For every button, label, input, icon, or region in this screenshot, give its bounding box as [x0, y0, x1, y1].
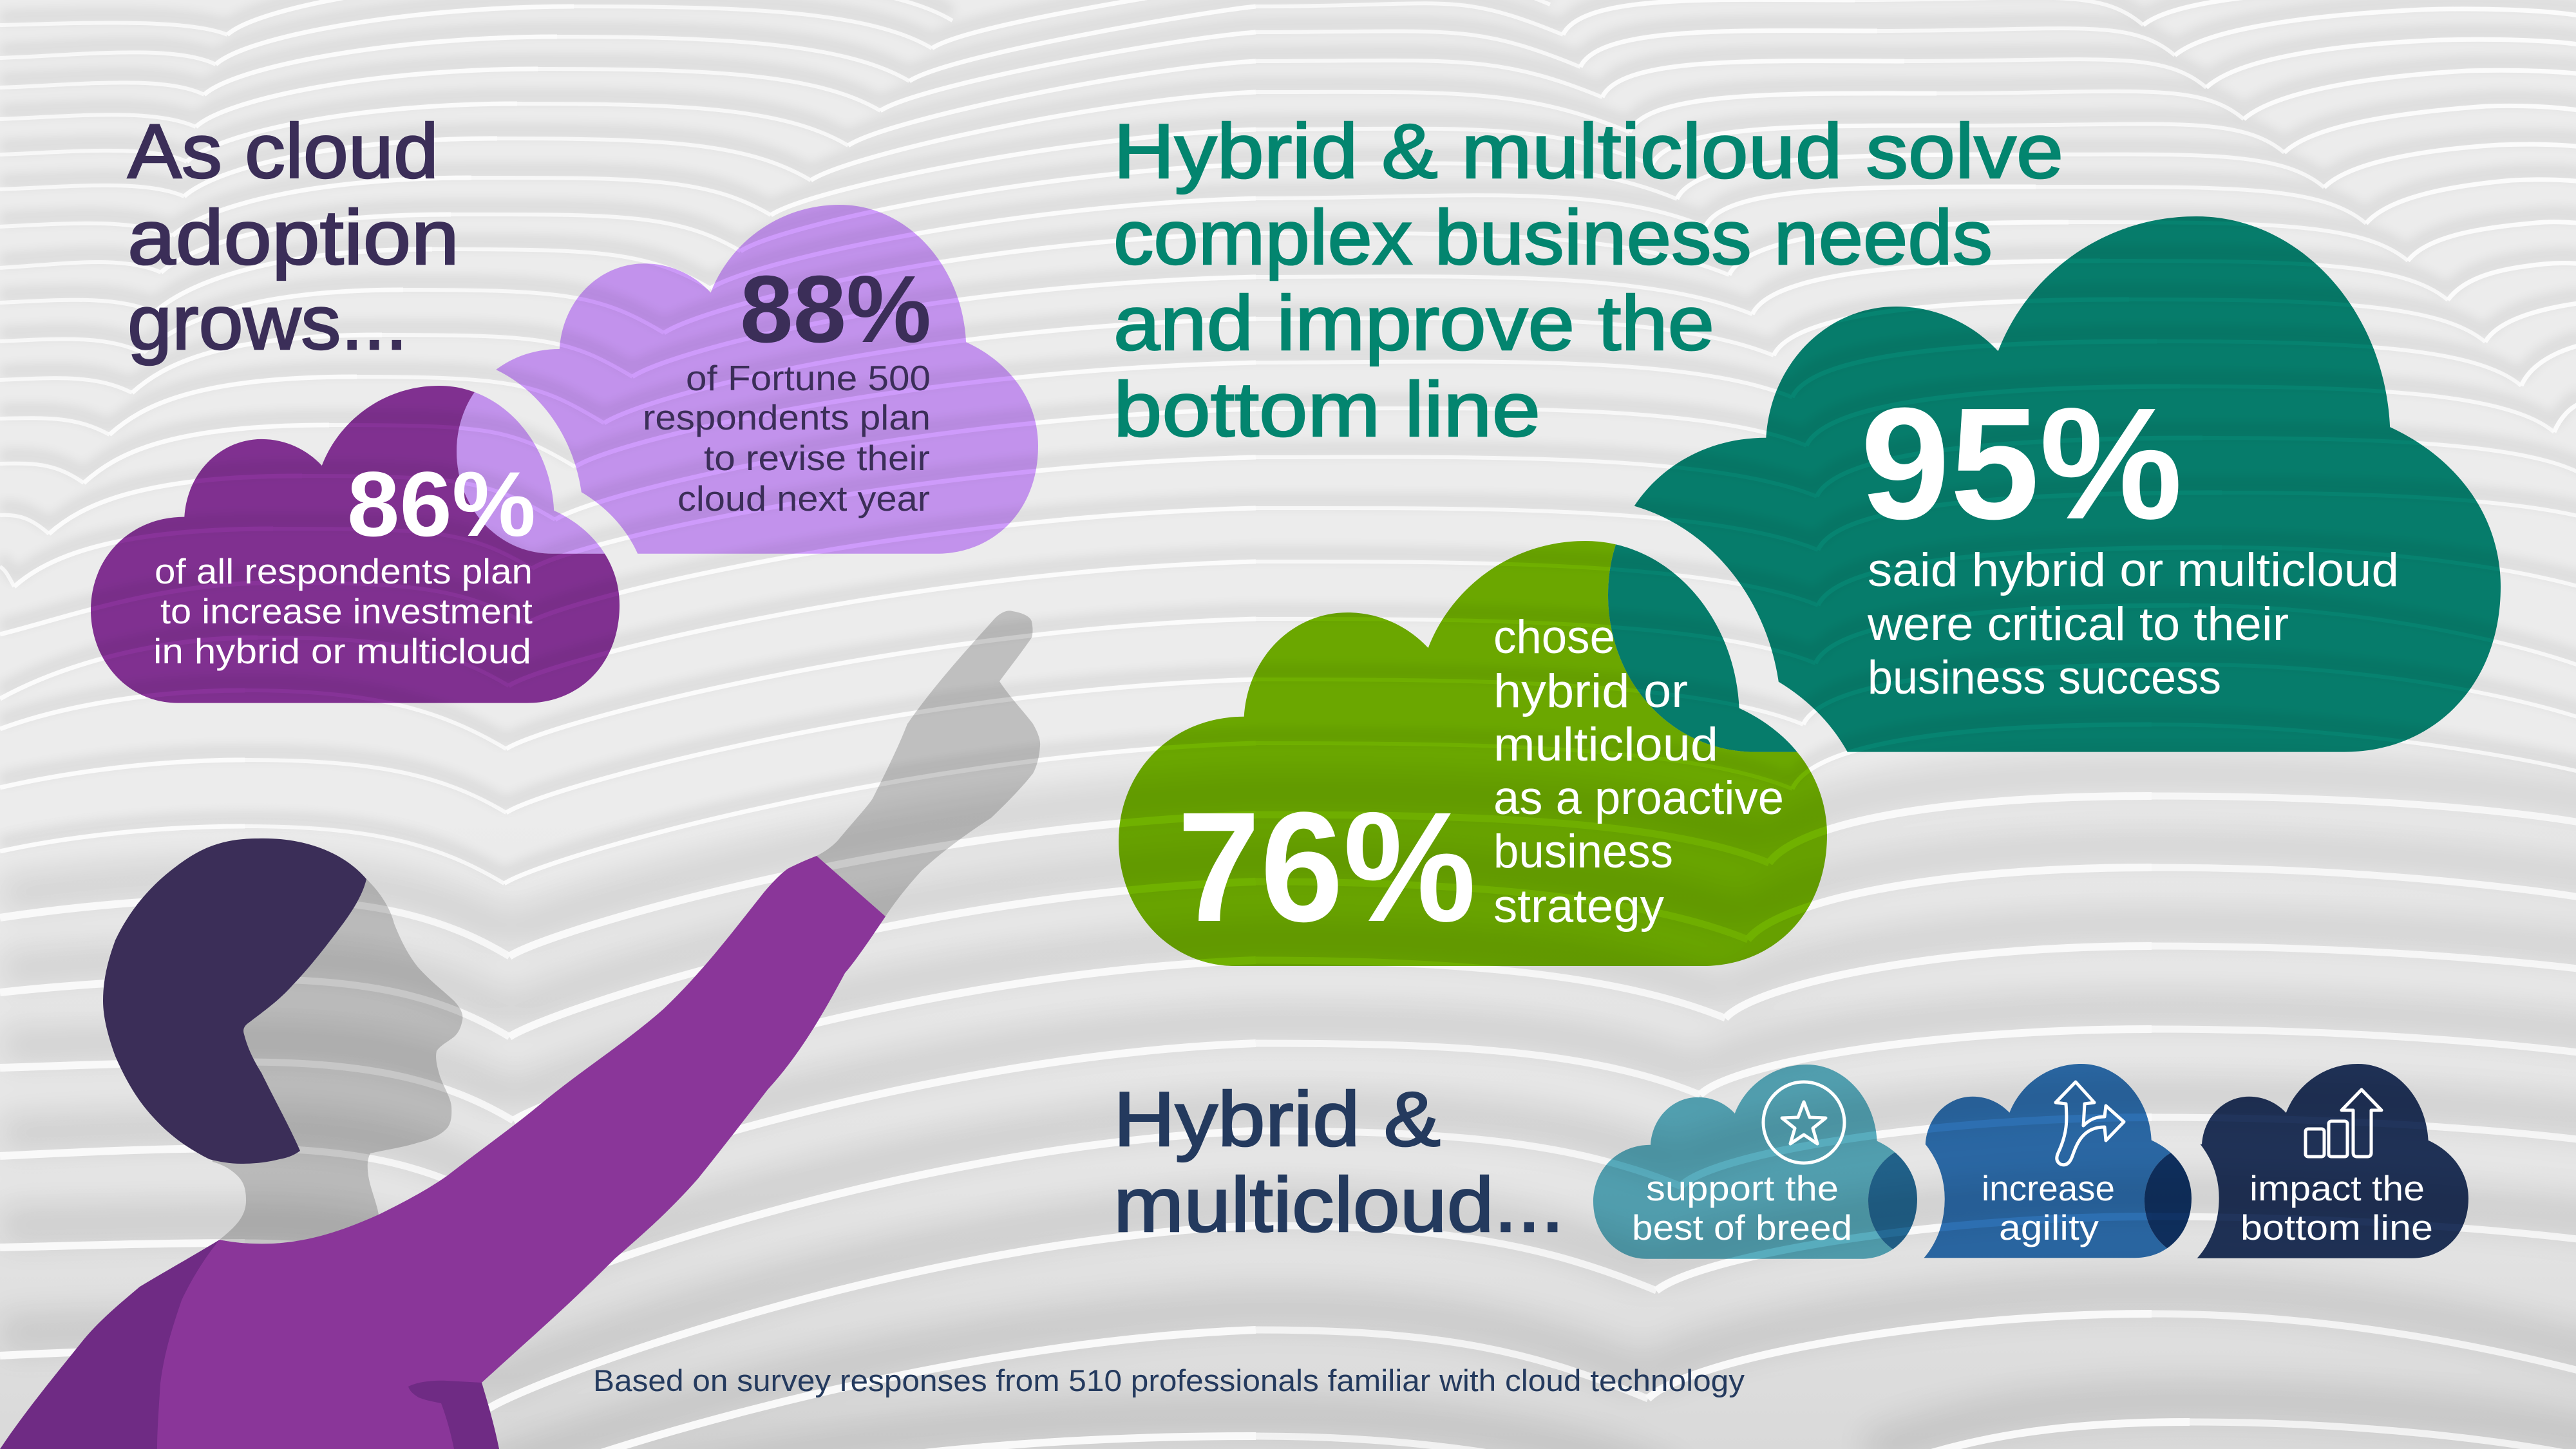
heading: hybrid and multicloud solve complex business needs: complex business needs [1113, 194, 1993, 281]
panel: 76 percent cloud: chose [1493, 611, 1615, 663]
panel: 86 percent cloud: 86% [347, 453, 536, 556]
heading: hybrid and multicloud: multicloud... [1113, 1162, 1564, 1248]
heading: hybrid and multicloud solve complex business needs: Hybrid & multicloud solve [1113, 108, 2063, 194]
panel: 86 percent cloud: to increase investment [160, 591, 533, 631]
panel: 88 percent cloud: 88% [740, 256, 931, 363]
panel: 76 percent cloud: hybrid or [1493, 665, 1688, 717]
heading: as cloud adoption grows: As cloud [128, 108, 439, 194]
panel: impact the bottom line cloud: bottom line [2240, 1208, 2433, 1247]
panel: 95 percent cloud: 95% [1861, 375, 2183, 553]
panel: impact the bottom line cloud [2197, 1064, 2468, 1258]
heading: hybrid and multicloud solve complex business needs: bottom line [1113, 366, 1540, 453]
panel: support the best of breed cloud: best of breed [1632, 1208, 1852, 1247]
panel: support the best of breed cloud [1593, 1065, 1917, 1259]
panel: 76 percent cloud: 76% [1177, 780, 1476, 954]
panel: 76 percent cloud: multicloud [1493, 719, 1718, 771]
heading: as cloud adoption grows [128, 108, 459, 366]
panel: 88 percent cloud: respondents plan [643, 397, 931, 437]
heading: hybrid and multicloud solve complex business needs [1113, 108, 2063, 453]
panel: 95 percent cloud: said hybrid or multicloud [1868, 544, 2399, 596]
panel: 76 percent cloud: strategy [1493, 880, 1665, 933]
panel: 88 percent cloud [457, 205, 1038, 554]
panel: 86 percent cloud: of all respondents plan [155, 551, 533, 591]
panel: 76 percent cloud: business [1493, 826, 1673, 878]
panel: 86 percent cloud: in hybrid or multicloud [153, 631, 531, 671]
panel: support the best of breed cloud: support the [1646, 1168, 1839, 1208]
panel: increase agility cloud [1924, 1064, 2192, 1258]
panel: increase agility cloud: increase [1982, 1168, 2115, 1208]
panel: 88 percent cloud: to revise their [704, 438, 930, 478]
panel: 95 percent cloud: business success [1868, 652, 2221, 704]
icon: growth bars and arrow [2306, 1090, 2382, 1157]
heading: hybrid and multicloud: Hybrid & [1113, 1076, 1441, 1162]
illustration: person pointing up [0, 611, 1040, 1449]
heading: hybrid and multicloud solve complex business needs: and improve the [1113, 280, 1714, 366]
heading: as cloud adoption grows: adoption [128, 194, 459, 281]
panel: 76 percent cloud: as a proactive [1493, 772, 1784, 824]
panel: 76 percent cloud [1119, 541, 1827, 966]
icon: branching arrow [2056, 1082, 2124, 1165]
panel: 95 percent cloud [1608, 216, 2501, 752]
panel: 86 percent cloud [91, 386, 620, 703]
footnote: survey source: Based on survey responses from 510 professionals familiar with cloud technology [593, 1363, 1745, 1397]
panel: increase agility cloud: agility [1999, 1208, 2099, 1247]
panel: 88 percent cloud: of Fortune 500 [686, 358, 931, 398]
panel: 88 percent cloud: cloud next year [677, 478, 930, 518]
icon: star in circle [1763, 1082, 1844, 1163]
panel: 95 percent cloud: were critical to their [1867, 598, 2289, 650]
heading: as cloud adoption grows: grows... [128, 279, 408, 366]
panel: impact the bottom line cloud: impact the [2249, 1168, 2425, 1208]
heading: hybrid and multicloud [1113, 1076, 1564, 1248]
